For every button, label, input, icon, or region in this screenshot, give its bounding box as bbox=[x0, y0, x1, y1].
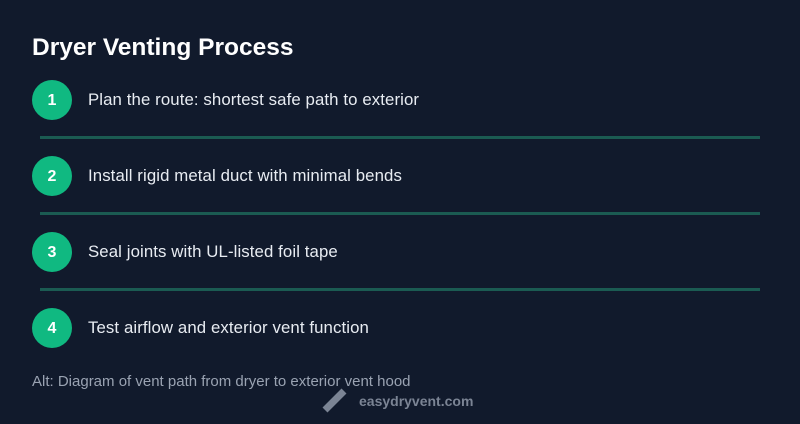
logo bbox=[322, 388, 473, 412]
badge 2: 2 bbox=[48, 168, 56, 185]
badge 1: 1 bbox=[48, 92, 56, 109]
step 4: Test airflow and exterior vent function bbox=[88, 318, 369, 337]
step 1: Plan the route: shortest safe path to exterior bbox=[88, 90, 419, 109]
icon: duct bbox=[322, 388, 346, 412]
step 4 bbox=[32, 308, 369, 348]
step 3 bbox=[32, 232, 338, 272]
step 2: Install rigid metal duct with minimal bends bbox=[88, 166, 402, 185]
badge 4: 4 bbox=[48, 320, 56, 337]
title: Dryer Venting Process bbox=[32, 34, 293, 61]
step 1 bbox=[32, 80, 419, 120]
badge 4 bbox=[32, 308, 72, 348]
badge 2 bbox=[32, 156, 72, 196]
logo: easydryvent.com bbox=[359, 393, 473, 409]
badge 1 bbox=[32, 80, 72, 120]
alt caption: Alt: Diagram of vent path from dryer to exterior vent hood bbox=[32, 373, 411, 390]
badge 3: 3 bbox=[48, 244, 56, 261]
step 2 bbox=[32, 156, 402, 196]
step 3: Seal joints with UL-listed foil tape bbox=[88, 242, 338, 261]
badge 3 bbox=[32, 232, 72, 272]
